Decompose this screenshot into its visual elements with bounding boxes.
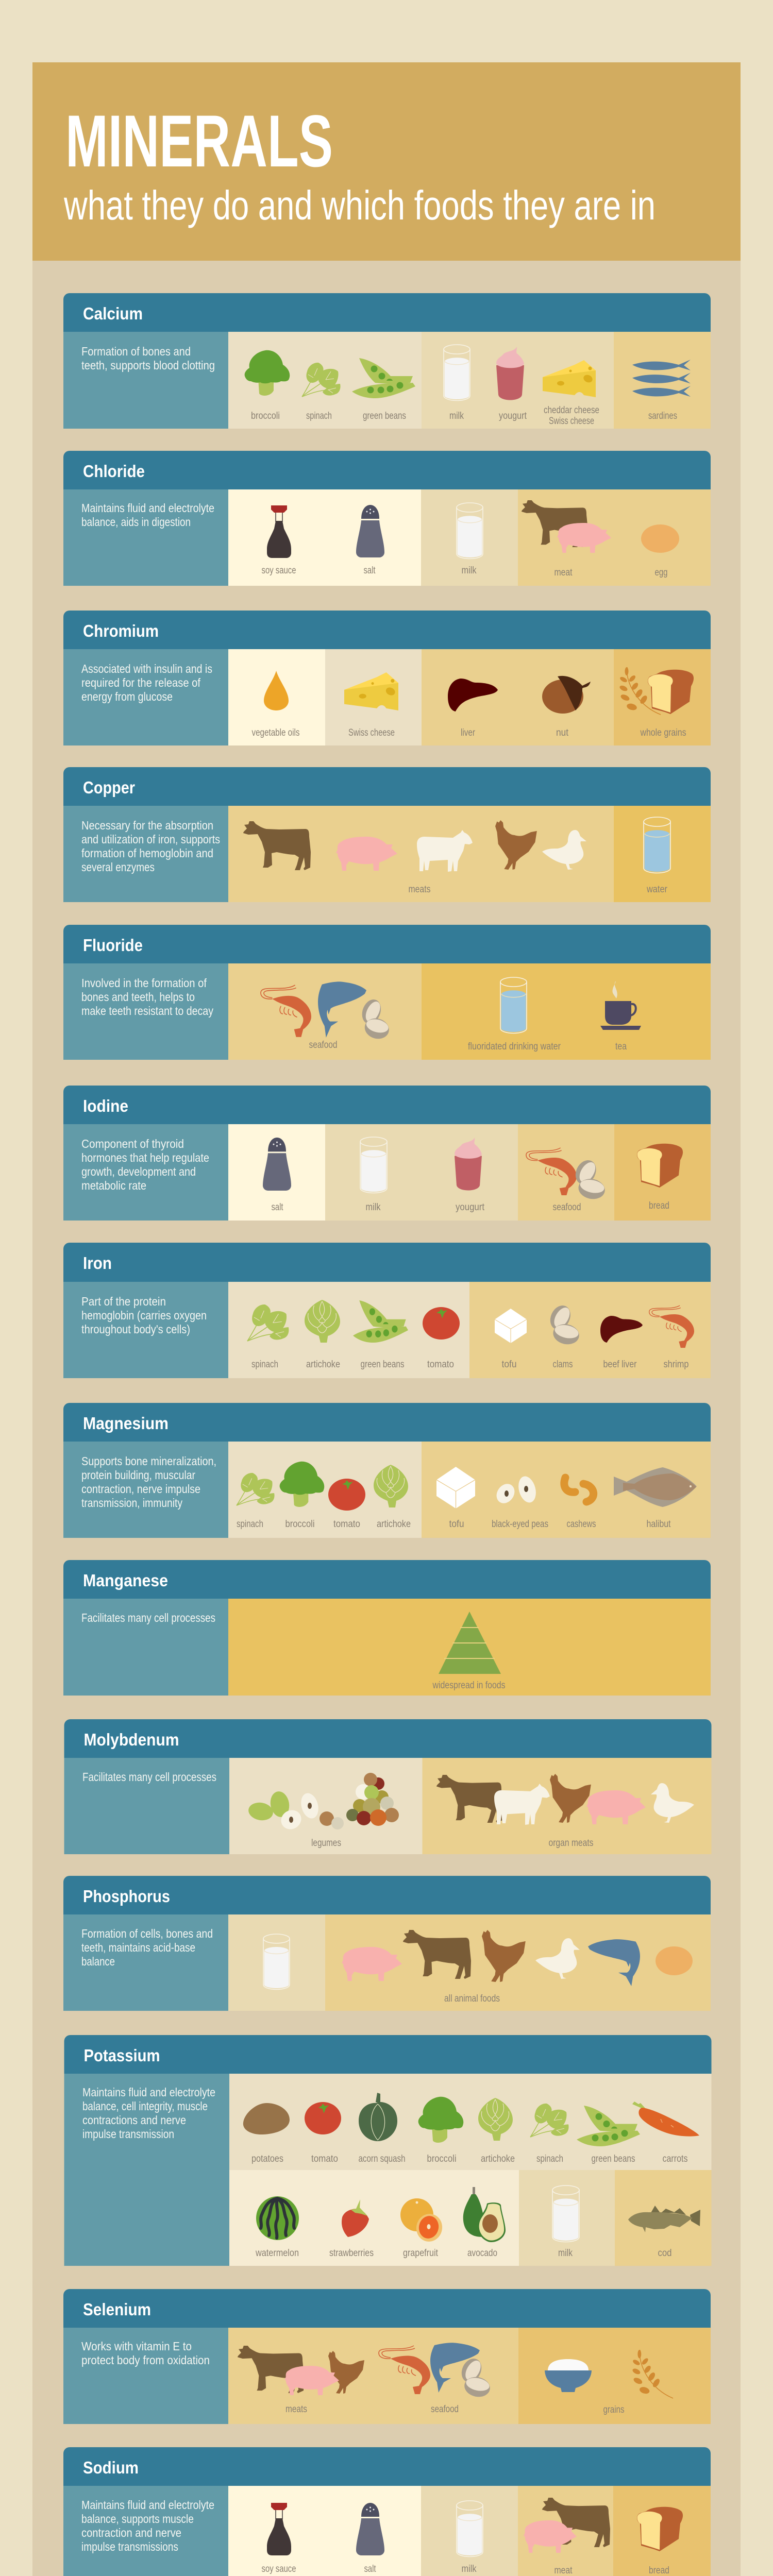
label: soy sauce: soy sauce [262, 565, 296, 576]
icon: watermelon [256, 2196, 299, 2240]
text block: Sodium function: impulse transmissions [81, 2540, 178, 2553]
text block: Potassium function: balance, cell integrity, muscle [82, 2099, 208, 2113]
text block: Chromium function: Associated with insulin and is [81, 662, 212, 675]
icon: soy sauce [267, 2503, 291, 2555]
text block: Sodium function: balance, supports muscle [81, 2512, 194, 2526]
text block: Magnesium function: transmission, immunity [81, 1496, 182, 1510]
text block: Selenium function [81, 2340, 210, 2367]
label: spinach: spinach [237, 1519, 263, 1530]
icon: green beans [352, 358, 415, 398]
text block: Magnesium function: protein building, muscular [81, 1468, 195, 1482]
icon: avocado [463, 2187, 506, 2242]
label: milk: milk [558, 2248, 573, 2259]
text block: Potassium function: Maintains fluid and electrolyte [82, 2086, 215, 2099]
label: sardines: sardines [648, 411, 677, 421]
icon: duck [535, 1938, 580, 1979]
heading: Phosphorus: Phosphorus [83, 1887, 170, 1906]
icon: chicken [482, 1930, 526, 1982]
heading: Calcium: Calcium [83, 304, 143, 323]
icon: chicken [495, 820, 537, 870]
icon: milk [552, 2185, 579, 2242]
icon: milk [360, 1137, 387, 1193]
label: spinach: spinach [306, 411, 332, 421]
icon: yogurt [455, 1138, 482, 1191]
text block: Sodium function [81, 2498, 214, 2553]
label: cashews: cashews [567, 1519, 596, 1530]
panel: Potassium [64, 2035, 711, 2266]
text block: Chromium function [81, 662, 212, 703]
label: widespread in foods: widespread in foods [432, 1680, 505, 1691]
label: cod: cod [658, 2248, 672, 2259]
icon: pig [557, 523, 611, 553]
icon: water [644, 817, 670, 873]
icon: strawberries [342, 2199, 369, 2237]
label: yogurt: yougurt [499, 411, 527, 421]
text block: Chloride function: Maintains fluid and electrolyte [81, 501, 214, 515]
icon: sardines [632, 360, 691, 397]
panel: Molybdenum [64, 1719, 711, 1854]
label: salt: salt [271, 1202, 283, 1213]
text block: Iron function: Part of the protein [81, 1295, 166, 1308]
icon: duck [542, 830, 586, 870]
icon: spinach [302, 363, 341, 397]
icon: shrimp [261, 985, 311, 1037]
icon: cod [628, 2206, 700, 2232]
label: milk: milk [366, 1202, 381, 1213]
icon: green beans [353, 1300, 408, 1343]
icon: duck [651, 1783, 694, 1823]
label: meat: meat [554, 567, 573, 578]
label: nut: nut [556, 727, 569, 738]
label: watermelon: watermelon [255, 2248, 299, 2259]
label: tofu: tofu [502, 1359, 516, 1370]
heading: Copper: Copper [83, 778, 135, 797]
text block: Fluoride function: Involved in the formation of [81, 976, 207, 990]
heading: Manganese: Manganese [83, 1571, 168, 1590]
text block: Phosphorus function [81, 1927, 213, 1968]
text block: Iodine function [81, 1137, 209, 1192]
icon: green beans [577, 2106, 640, 2146]
text block: Calcium function: teeth, supports blood clotting [81, 359, 215, 372]
icon: vegetable oil [264, 671, 289, 710]
title: MINERALS [65, 100, 333, 182]
icon: potatoes [243, 2103, 290, 2134]
icon: beef liver [600, 1316, 643, 1343]
icon: grapefruit [400, 2198, 445, 2244]
icon: fish [430, 2343, 480, 2393]
label: milk: milk [462, 565, 477, 576]
panel: Selenium [63, 2289, 711, 2424]
label: tofu: tofu [449, 1519, 464, 1530]
text block: Phosphorus function: balance [81, 1955, 115, 1968]
text block: Chromium function: required for the release of [81, 676, 201, 689]
icon: acorn squash [359, 2093, 397, 2141]
text block: Calcium function [81, 345, 215, 372]
label: meat: meat [554, 2565, 573, 2576]
label: milk: milk [462, 2564, 477, 2574]
text block: Potassium function [82, 2086, 215, 2141]
panel: Sodium [63, 2447, 711, 2576]
icon: soy sauce [267, 505, 291, 558]
heading: Sodium: Sodium [83, 2458, 139, 2477]
label: strawberries: strawberries [329, 2248, 374, 2259]
label: meats: meats [285, 2404, 307, 2415]
panel: Fluoride [63, 925, 711, 1060]
panel: Calcium [63, 293, 711, 429]
icon: spinach [237, 1473, 275, 1505]
text block: Magnesium function: contraction, nerve impulse [81, 1482, 200, 1496]
icon: milk [457, 503, 483, 558]
label: carrots: carrots [663, 2154, 687, 2164]
label: artichoke: artichoke [377, 1519, 411, 1530]
text block: Sodium function: Maintains fluid and electrolyte [81, 2498, 214, 2512]
text block: Molybdenum function: Facilitates many cell processes [82, 1770, 216, 1784]
icon: clams [359, 996, 391, 1041]
icon: shrimp [526, 1148, 577, 1195]
panel: Magnesium [63, 1403, 711, 1538]
text block: Copper function: Necessary for the absorption [81, 819, 213, 832]
label: liver: liver [461, 727, 476, 738]
label: potatoes: potatoes [251, 2154, 283, 2164]
text block: Copper function [81, 819, 220, 874]
label: milk: milk [449, 411, 464, 421]
icon: cow [243, 821, 311, 870]
text block: Copper function: several enzymes [81, 860, 155, 874]
label: cheddar and Swiss cheese: Swiss cheese [549, 416, 594, 427]
icon: egg [641, 524, 679, 553]
label: cheddar and Swiss cheese [544, 405, 599, 427]
icon: clams [546, 1302, 581, 1347]
icon: rice bowl [545, 2359, 592, 2392]
text block: Iodine function: growth, development and [81, 1165, 196, 1178]
icon: cow [542, 2498, 610, 2547]
icon: shrimp [379, 2346, 430, 2394]
text block: Selenium function: protect body from oxidation [81, 2353, 210, 2367]
icon: wheat [619, 667, 661, 715]
icon: cashews [564, 1478, 594, 1502]
label: bread: bread [649, 2565, 669, 2576]
heading: Selenium: Selenium [83, 2300, 151, 2319]
icon: tea [600, 981, 641, 1030]
label: soy sauce: soy sauce [262, 2564, 296, 2574]
icon: tofu [436, 1467, 475, 1509]
label: water: water [646, 884, 668, 895]
icon: legumes [247, 1773, 399, 1833]
icon: clams [572, 1157, 607, 1201]
panel: Iron [63, 1243, 711, 1378]
icon: salt [263, 1138, 291, 1191]
text block: Fluoride function: make teeth resistant to decay [81, 1004, 213, 1018]
text block: Potassium function: impulse transmission [82, 2127, 174, 2141]
label: artichoke: artichoke [481, 2154, 515, 2164]
icon: spinach [247, 1304, 289, 1341]
icon: liver [448, 679, 498, 711]
icon: clams [458, 2355, 492, 2399]
icon: bread [637, 1144, 683, 1188]
heading: Chromium: Chromium [83, 621, 159, 640]
icon: milk [263, 1934, 290, 1990]
label: Swiss cheese: Swiss cheese [348, 727, 395, 738]
label: grains: grains [603, 2404, 625, 2415]
icon: artichoke [374, 1465, 408, 1507]
text block: Potassium function: contractions and nerve [82, 2113, 186, 2127]
label: spinach: spinach [536, 2154, 563, 2164]
label: green beans: green beans [361, 1359, 404, 1370]
icon: tofu [495, 1309, 527, 1343]
icon: sheep [417, 830, 473, 872]
icon: wheat [632, 2350, 673, 2398]
icon: artichoke [305, 1300, 340, 1343]
label: fluoridated drinking water: fluoridated drinking water [468, 1041, 561, 1052]
panel: Chloride [63, 451, 711, 586]
label: seafood: seafood [431, 2404, 459, 2415]
heading: Iodine: Iodine [83, 1096, 128, 1115]
label: tea: tea [615, 1041, 627, 1052]
label: spinach: spinach [251, 1359, 278, 1370]
label: tomato: tomato [427, 1359, 454, 1370]
icon: chicken [328, 2351, 364, 2394]
text block: Chromium function: energy from glucose [81, 690, 173, 703]
icon: pig [284, 2366, 339, 2395]
label: artichoke: artichoke [306, 1359, 340, 1370]
icon: pig [524, 2520, 577, 2553]
label: shrimp: shrimp [664, 1359, 688, 1370]
label: seafood: seafood [309, 1040, 337, 1050]
icon: egg [656, 1946, 693, 1975]
label: whole grains: whole grains [640, 727, 686, 738]
icon: food pyramid [439, 1612, 501, 1674]
label: acorn squash: acorn squash [359, 2154, 405, 2164]
label: meats: meats [408, 884, 431, 895]
text block: Calcium function: Formation of bones and [81, 345, 191, 358]
text block: Iodine function: metabolic rate [81, 1179, 146, 1192]
label: broccoli: broccoli [427, 2154, 457, 2164]
label: egg: egg [654, 567, 668, 578]
icon: shrimp [649, 1306, 694, 1348]
icon: broccoli [418, 2097, 463, 2143]
icon: fish [318, 981, 366, 1038]
icon: milk [457, 2501, 483, 2556]
panel: Iodine [63, 1086, 711, 1221]
icon: Swiss cheese [344, 672, 398, 710]
icon: halibut [614, 1467, 697, 1507]
text block: Iodine function: hormones that help regulate [81, 1151, 209, 1164]
heading: Iron: Iron [83, 1253, 112, 1273]
heading: Molybdenum: Molybdenum [83, 1730, 179, 1749]
text block: Manganese function: Facilitates many cell processes [81, 1611, 215, 1624]
icon: tomato [328, 1479, 365, 1511]
label: organ meats: organ meats [548, 1838, 594, 1849]
icon: cow [436, 1775, 503, 1823]
icon: fish [588, 1939, 640, 1986]
label: clams: clams [552, 1359, 573, 1370]
icon: tomato [305, 2102, 341, 2134]
label: avocado: avocado [467, 2248, 497, 2259]
label: all animal foods: all animal foods [444, 1993, 500, 2004]
icon: sheep [494, 1784, 550, 1825]
heading: Potassium: Potassium [83, 2046, 160, 2065]
text block: Chloride function: balance, aids in digestion [81, 515, 191, 529]
icon: yogurt [496, 347, 524, 400]
icon: black-eyed peas [493, 1475, 539, 1507]
text block: Iron function [81, 1295, 207, 1336]
text block: Magnesium function: Supports bone mineralization, [81, 1454, 216, 1468]
icon: tomato [423, 1307, 460, 1340]
icon: cow [522, 500, 588, 547]
text block: Sodium function: contraction and nerve [81, 2526, 181, 2539]
text block: Copper function: and utilization of iron, supports [81, 833, 220, 846]
text block: Chloride function [81, 501, 214, 529]
icon: pig [586, 1790, 646, 1824]
heading: Magnesium: Magnesium [83, 1414, 169, 1433]
text block: Phosphorus function: Formation of cells, bones and [81, 1927, 213, 1940]
label: grapefruit: grapefruit [403, 2248, 439, 2259]
icon: water [500, 977, 527, 1033]
icon: pig [342, 1947, 402, 1981]
icon: pig [336, 837, 397, 871]
label: tomato: tomato [333, 1519, 360, 1530]
text block: Selenium function: Works with vitamin E to [81, 2340, 192, 2353]
label: beef liver: beef liver [603, 1359, 637, 1370]
label: tomato: tomato [311, 2154, 338, 2164]
icon: bread [648, 670, 694, 714]
icon: broccoli [245, 350, 290, 396]
icon: spinach [530, 2104, 569, 2137]
icon: broccoli [280, 1462, 324, 1507]
title banner [32, 62, 741, 261]
text block: Fluoride function [81, 976, 213, 1018]
text block: Fluoride function: bones and teeth, helps to [81, 990, 195, 1004]
text block: Iron function: hemoglobin (carries oxygen [81, 1309, 207, 1322]
label: green beans: green beans [363, 411, 406, 421]
icon: salt [356, 505, 384, 557]
text block: Copper function: formation of hemoglobin and [81, 846, 213, 860]
icon: carrots [632, 2102, 699, 2137]
text block: Iron function: throughout body's cells) [81, 1323, 190, 1336]
label: black-eyed peas: black-eyed peas [492, 1519, 548, 1530]
label: broccoli: broccoli [251, 411, 280, 421]
icon: salt [356, 2503, 384, 2555]
label: vegetable oils: vegetable oils [251, 727, 300, 738]
label: salt: salt [364, 2564, 376, 2574]
label: legumes: legumes [311, 1838, 341, 1849]
label: yogurt: yougurt [456, 1202, 485, 1213]
heading: Chloride: Chloride [83, 462, 145, 481]
icon: milk [444, 345, 470, 401]
panel: Manganese [63, 1560, 711, 1696]
panel: Copper [63, 767, 711, 902]
icon: nut [542, 676, 591, 714]
panel: Phosphorus [63, 1876, 711, 2011]
heading: Fluoride: Fluoride [83, 936, 143, 955]
label: broccoli: broccoli [285, 1519, 314, 1530]
icon: chicken [550, 1774, 591, 1823]
icon: artichoke [478, 2098, 513, 2141]
icon: cow [403, 1930, 471, 1979]
label: salt: salt [364, 565, 376, 576]
label: bread: bread [649, 1200, 669, 1211]
panel: Chromium [63, 611, 711, 745]
icon: bread [637, 2507, 683, 2551]
text block: Iodine function: Component of thyroid [81, 1137, 184, 1150]
text block: Phosphorus function: teeth, maintains acid-base [81, 1941, 195, 1954]
text block: Magnesium function [81, 1454, 216, 1510]
label: seafood: seafood [552, 1202, 581, 1213]
icon: cheese [543, 360, 596, 397]
icon: cow [238, 2346, 304, 2393]
label: halibut: halibut [646, 1519, 671, 1530]
label: cheddar and Swiss cheese: cheddar cheese [544, 405, 599, 416]
label: green beans: green beans [592, 2154, 635, 2164]
